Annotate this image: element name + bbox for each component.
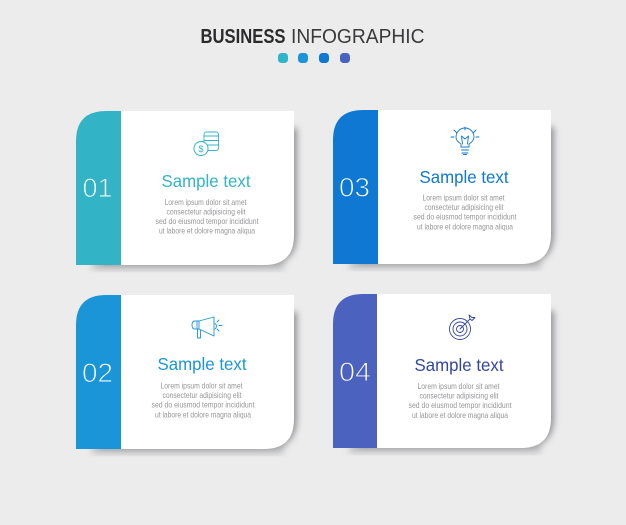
icon: light bulb xyxy=(451,127,479,154)
heading 03: Sample text xyxy=(420,167,509,187)
body text 01 xyxy=(156,197,259,236)
heading 02: Sample text xyxy=(158,354,247,374)
body text 01: Lorem ipsum dolor sit amet xyxy=(164,197,247,207)
body text 01: ut labore et dolore magna aliqua xyxy=(159,226,255,236)
title xyxy=(200,26,424,48)
number 03: 03 xyxy=(339,172,370,202)
body text 02 xyxy=(152,380,255,420)
body text 04: Lorem ipsum dolor sit amet xyxy=(418,381,500,391)
icon: target xyxy=(450,315,475,340)
body text 02: ut labore et dolore magna aliqua xyxy=(155,410,251,420)
body text 04: consectetur adipisicing elit xyxy=(420,390,499,400)
number panel 03 xyxy=(333,110,378,264)
body text 04: sed do eiusmod tempor incididunt xyxy=(408,400,512,410)
body text 03: sed do eiusmod tempor incididunt xyxy=(414,212,517,222)
body text 04: ut labore et dolore magna aliqua xyxy=(412,410,508,420)
number 04: 04 xyxy=(339,357,371,387)
icon: coins: $ xyxy=(198,144,204,154)
body text 02: sed do eiusmod tempor incididunt xyxy=(152,400,255,410)
number panel 01 xyxy=(76,111,121,265)
body text 01: consectetur adipisicing elit xyxy=(166,206,246,216)
icon: megaphone xyxy=(192,317,222,338)
title: INFOGRAPHIC xyxy=(291,26,424,48)
number 02: 02 xyxy=(82,358,113,388)
title: BUSINESS xyxy=(200,26,286,48)
icon: coins xyxy=(194,132,218,156)
body text 02: Lorem ipsum dolor sit amet xyxy=(160,380,243,390)
panel: card 01 xyxy=(76,111,297,270)
number 01: 01 xyxy=(82,173,112,203)
panel: card 02 xyxy=(76,295,297,454)
heading 01: Sample text xyxy=(162,171,251,191)
panel: card 03 xyxy=(333,110,554,269)
colour dots xyxy=(278,53,350,63)
body text 03 xyxy=(414,192,517,232)
body text 04 xyxy=(408,381,512,420)
body text 01: sed do eiusmod tempor incididunt xyxy=(156,216,259,226)
body text 03: Lorem ipsum dolor sit amet xyxy=(422,192,505,202)
number panel 04 xyxy=(333,294,377,448)
heading 04: Sample text xyxy=(414,355,504,375)
panel: card 04 xyxy=(333,294,554,453)
body text 03: ut labore et dolore magna aliqua xyxy=(417,222,513,232)
body text 03: consectetur adipisicing elit xyxy=(424,202,504,212)
body text 02: consectetur adipisicing elit xyxy=(162,390,242,400)
number panel 02 xyxy=(76,295,121,449)
